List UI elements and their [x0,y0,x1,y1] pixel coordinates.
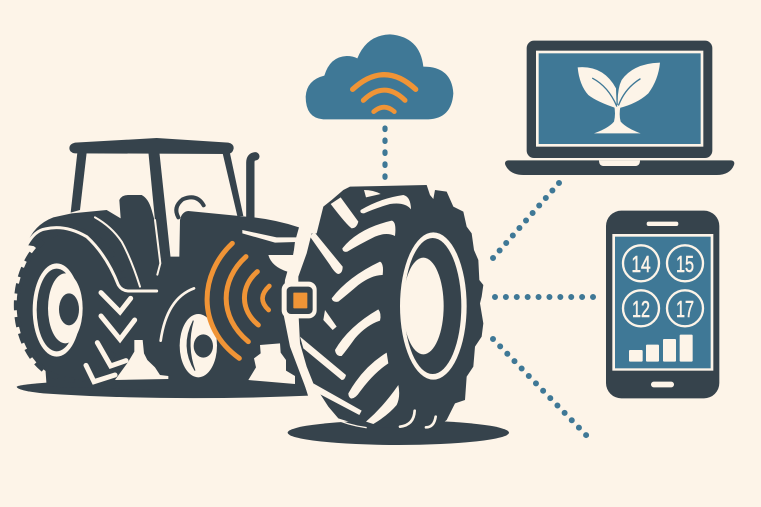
plant seedling icon [578,63,660,133]
tyre reading 14: 14 [631,251,651,277]
tyre reading 12: 12 [632,296,650,322]
front wheel fender line [161,288,194,341]
wifi icon [353,75,416,112]
dotted link: tyre to phone [495,294,594,300]
hood highlight [242,230,297,243]
laptop screen [536,51,703,147]
smartphone [606,211,719,398]
tyre ground shadow [288,420,509,445]
dotted link: tyre to lower right [493,339,587,436]
phone bar chart [629,335,693,362]
tyre reading 12 [623,290,659,326]
cream cut strip [287,227,328,421]
upper tyre treads [310,190,411,302]
cloud shape [306,34,453,119]
front wheel [180,314,217,377]
tractor cab frame [69,138,243,258]
phone speaker [647,222,678,226]
rear wheel rim [33,263,83,357]
steering wheel [176,197,204,217]
tyre close-up [282,185,509,445]
tractor body [27,195,308,395]
cloud with wifi [306,34,453,119]
tyre reading 15 [667,245,703,281]
rear wheel tyre [17,230,127,380]
dotted link: tyre to laptop [493,183,559,258]
lower tyre treads [300,309,399,424]
tyre reading 15: 15 [676,251,694,277]
tyre reading 17 [667,290,703,326]
tyre reading 14 [623,245,659,281]
tractor exhaust stack [250,156,255,218]
tyre silhouette [298,185,483,427]
phone home button [651,382,674,387]
tyre reading 17: 17 [676,296,694,322]
tyre sidewall and hub [400,232,467,380]
phone body [606,211,719,398]
dotted link: cloud to tyre [382,128,388,178]
laptop [505,41,734,175]
cream gap between wheels [115,340,168,380]
phone screen [612,234,713,371]
tractor [17,138,309,398]
laptop lid [527,41,712,158]
orange signal waves [207,243,269,358]
bottom edge highlight [332,417,367,428]
bottom lugs [400,411,436,427]
cream gap behind front wheel [248,343,295,384]
laptop base [505,160,734,175]
sensor module [282,282,317,318]
rear tread chevrons [86,293,135,382]
tractor ground shadow [17,380,309,398]
fender outline [27,217,160,291]
